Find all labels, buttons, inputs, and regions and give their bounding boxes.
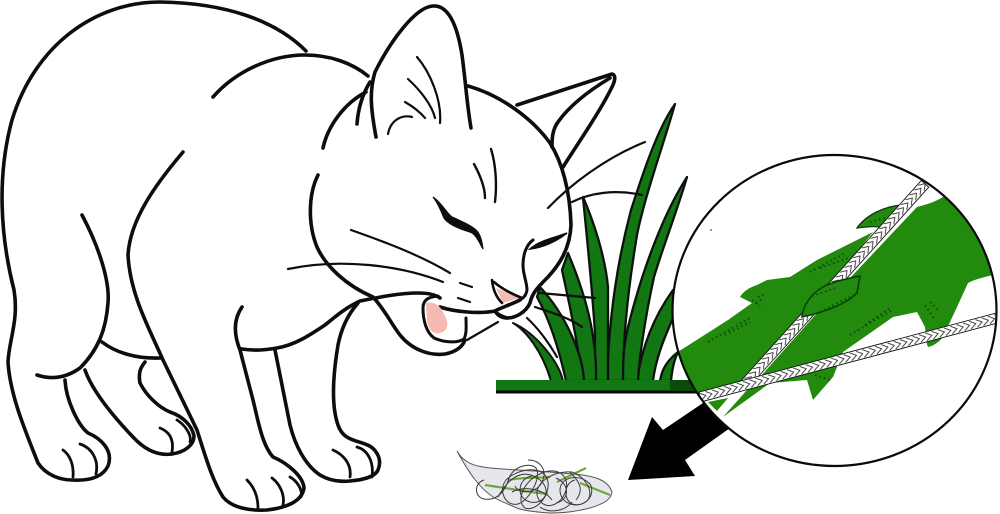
haunch: [37, 215, 108, 378]
blade: left: [537, 287, 584, 381]
neck lines: [323, 82, 370, 148]
circle border: [672, 155, 996, 466]
nose outline: [492, 280, 522, 303]
ground shadow: [496, 390, 706, 394]
nose pink: [496, 288, 520, 303]
grass clump: [496, 104, 706, 391]
arm underside: [242, 293, 440, 350]
eye: left: [433, 197, 483, 249]
blade: second right: [622, 177, 687, 381]
right whiskers: [548, 142, 645, 208]
second tangle: [498, 460, 580, 511]
paw toes: [63, 420, 372, 508]
hairball membrane: [457, 451, 612, 513]
hairball: [457, 451, 612, 513]
speck: [710, 229, 712, 231]
leaf upper band: [670, 232, 873, 400]
inner ear lines: [388, 57, 440, 134]
whiskers: [288, 142, 645, 357]
inner foreleg: [275, 303, 380, 481]
toes: front paws: [247, 447, 372, 508]
green strands: [485, 468, 610, 495]
muzzle left lip: [440, 300, 520, 312]
muzzle dashes: [458, 283, 472, 302]
magnified leaf contents: [670, 180, 1000, 417]
mouth outline: [423, 296, 466, 342]
blade: left center: [562, 253, 596, 381]
leaf barb: middle: [802, 276, 860, 317]
blade: tall right: [607, 104, 675, 381]
leaf barb: lower left: [708, 398, 728, 411]
cheek and jaw: [310, 175, 465, 354]
leaf lower band: [723, 180, 1000, 417]
speckle marks: [708, 218, 938, 380]
cat body outline: [2, 2, 306, 480]
forehead lines: [474, 149, 496, 202]
cat line art: [2, 2, 645, 510]
rope: diagonal: [739, 181, 929, 389]
whiskers across grass: [467, 293, 595, 357]
arrow: [628, 365, 780, 480]
belly line: [102, 342, 160, 358]
circle background: [672, 155, 996, 466]
chest line: [128, 152, 304, 510]
ground dark end: [670, 380, 710, 391]
lower lip: [495, 311, 507, 318]
left ear: [371, 6, 471, 137]
magnified circle: [670, 155, 1000, 466]
rope strand: [699, 312, 1000, 402]
toes: rear paw: [63, 420, 190, 477]
tangled hair: [476, 465, 592, 509]
rope strand: [739, 181, 929, 389]
leaf barb: top: [857, 205, 902, 228]
left whiskers: [288, 230, 450, 282]
right ear: [517, 74, 615, 167]
ground strip: [496, 380, 706, 391]
barb speckles: [812, 288, 858, 312]
back leg two: [85, 362, 194, 454]
blade: far right small: [660, 352, 678, 381]
nose bridge: [520, 240, 533, 300]
blade: small left: [513, 323, 563, 381]
blade: right short: [637, 290, 673, 381]
shoulder line: [213, 55, 368, 97]
nose: [492, 280, 522, 303]
leaf speckles: [708, 218, 938, 380]
mouth: [423, 296, 466, 342]
tongue: [426, 303, 447, 333]
inner ear strokes: [388, 57, 440, 134]
eye: right: [530, 233, 567, 249]
blade: center: [583, 197, 608, 381]
head outline: [468, 86, 571, 318]
rope: lower: [699, 312, 1000, 402]
